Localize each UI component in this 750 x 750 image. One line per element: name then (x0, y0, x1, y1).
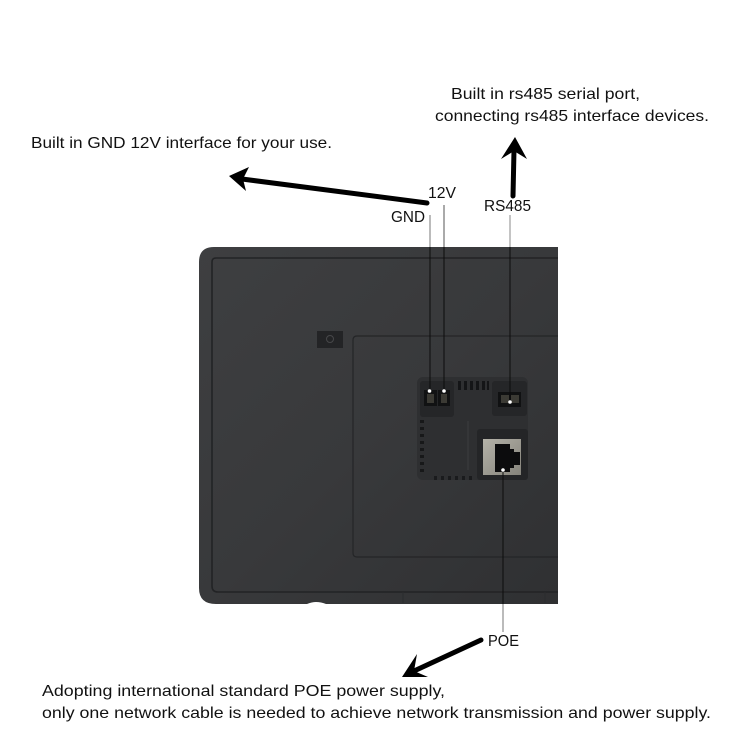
text: RS485 note (435, 86, 709, 125)
port: GND terminal (424, 390, 437, 406)
leader line: RS485 (508, 215, 512, 404)
text: GND 12V note: Built in GND 12V interface for your use. (31, 135, 332, 152)
vent slots side (420, 420, 424, 472)
leader line: GND (428, 215, 431, 393)
panel: device back (199, 247, 558, 604)
label: GND: GND (391, 209, 425, 226)
leader line: 12V (442, 205, 446, 393)
text: POE note (42, 683, 711, 722)
port: RJ45 ethernet jack (483, 439, 521, 475)
port: 12V terminal (438, 390, 450, 406)
text: RS485 note: connecting rs485 interface devices. (435, 108, 709, 125)
leader line: POE (501, 468, 505, 632)
arrow: to POE note (402, 640, 481, 677)
port recess (477, 429, 528, 480)
text: POE note: only one network cable is needed to achieve network transmission and power supply. (42, 705, 711, 722)
arrow: to RS485 note (501, 137, 527, 196)
text: POE note: Adopting international standard POE power supply, (42, 683, 445, 700)
port: RS485 terminal (498, 392, 521, 407)
vent slots bottom (434, 476, 472, 480)
label: 12V: 12V (428, 185, 456, 202)
vent slots top (458, 381, 489, 390)
connector module (417, 377, 528, 480)
label: RS485: RS485 (484, 198, 531, 215)
text: RS485 note: Built in rs485 serial port, (451, 86, 640, 103)
label: POE: POE (488, 633, 519, 650)
icon: wall-mount slot (317, 331, 343, 348)
arrow: to GND 12V note (229, 167, 427, 203)
